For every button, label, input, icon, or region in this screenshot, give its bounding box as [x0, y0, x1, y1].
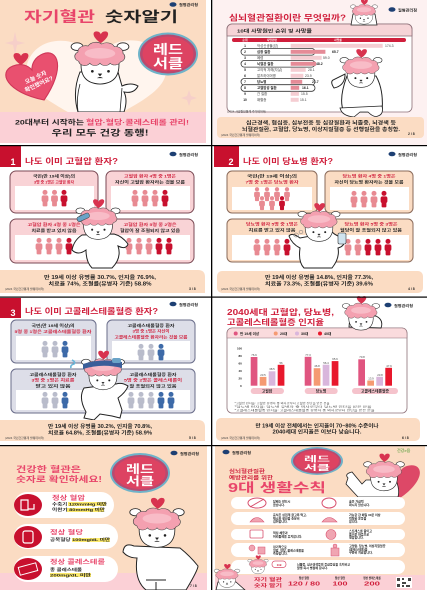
row values: 59.0 — [323, 56, 330, 60]
category pills: 고콜레스테롤혈증 — [361, 388, 389, 394]
card: normal cholesterol: 200mg/dL 미만 — [50, 572, 92, 578]
rule row 3: 생활합니다. — [349, 535, 364, 540]
rule row 5: 발생 즉시 병원에 갑니다. — [297, 565, 328, 570]
bottom band: numbers: 자기 혈관 — [254, 576, 283, 583]
card 2 — [107, 320, 195, 363]
big white heart background — [26, 40, 166, 128]
page number: 7 / 8 — [190, 584, 197, 588]
card 3: 고콜레스테롤혈증 환자 — [30, 372, 77, 377]
title: 예방관리를 위한 — [229, 474, 274, 482]
seal: red circle — [138, 32, 198, 76]
row numbers: 3 — [244, 56, 246, 60]
row names: 악성신생물(암) — [257, 43, 278, 48]
bottom band: (2024 국민건강통계 발췌데이터) — [221, 286, 260, 291]
panel: what is cardio-cerebrovascular disease — [213, 0, 427, 145]
chart panel — [227, 328, 407, 413]
bottom band — [217, 117, 424, 138]
card 3 — [10, 219, 98, 263]
card 4: 5명 중 2명은 콜레스테롤이 — [124, 378, 183, 382]
card 4: 혈압이 잘 조절되지 않고 있음 — [120, 228, 181, 233]
logo — [170, 302, 198, 307]
row numbers: 9 — [244, 92, 246, 96]
title: 심뇌혈관질환 — [229, 468, 266, 475]
row numbers: 7 — [244, 80, 246, 84]
bottom band: numbers: 정상 혈압 — [299, 576, 310, 580]
card: normal blood pressure: 이완기 80mmHg 미만 — [52, 507, 106, 512]
row values: 15.5 — [301, 92, 308, 96]
row values: 28.1 — [308, 68, 315, 72]
card 4: 혈당이 잘 조절되지 않고 있음 — [340, 228, 403, 232]
title — [228, 468, 326, 495]
card: normal cholesterol: 총 콜레스테롤 — [50, 567, 83, 572]
bottom band: 만 19세 이상 유병률 30.2%, 인지율 70.8%, — [48, 423, 153, 430]
alpaca peeking — [342, 296, 382, 330]
bar values: 23.8 — [377, 373, 383, 377]
bottom band: numbers: 정상 혈당 — [335, 576, 346, 580]
notes: *당뇨병 인지율: 당뇨병 유병자 중 의사로부터 당뇨병 진단을 받은 분율 — [234, 404, 373, 408]
number tab — [214, 146, 239, 167]
legend: 만 19세 이상 — [240, 331, 260, 336]
rule row 3: 허리둘레를 유지합니다. — [273, 533, 302, 538]
seal: red circle: 서클 — [153, 56, 183, 71]
card: normal blood pressure — [14, 492, 114, 518]
icon: treatment — [331, 544, 339, 556]
bottom band: 만 19세 이상 유병률 30.7%, 인지율 76.9%, — [44, 274, 157, 281]
icon: regular check — [249, 545, 265, 554]
row names: 심장 질환 — [257, 49, 271, 54]
notes: *고콜레스테롤혈증 인지율: 고콜레스테롤혈증 유병자 중 의사로부터 진단을 받은 분율 — [234, 408, 376, 412]
card 1: 국민(만 19세 이상)의 — [247, 174, 298, 178]
row numbers: 10 — [243, 98, 247, 102]
table header: 사망원인 — [267, 38, 278, 42]
logo: 질병관리청 — [394, 303, 413, 308]
rule row 5: 뇌졸중, 심근경색증의 응급증상을 숙지하고 — [297, 562, 350, 566]
table panel: 10대 사망원인 순위 및 사망률 — [237, 28, 313, 34]
card 2: 고혈압 환자 4명 중 1명은 — [124, 174, 177, 178]
alpaca character — [72, 199, 128, 268]
panel: nine lifestyle rules — [214, 446, 425, 590]
bottom band: 6 / 8 — [402, 436, 409, 440]
notes: *고혈압 인지율: 고혈압 유병자 중 의사로부터 고혈압 진단을 받은 분율 — [234, 401, 331, 405]
logo: 질병관리청 — [398, 8, 417, 12]
icon: no smoking — [248, 498, 266, 508]
alpaca character — [123, 498, 198, 590]
title: 자기혈관 — [24, 9, 95, 26]
icon: exercise — [322, 518, 337, 522]
bottom band: (2024 국민건강통계 발췌데이터) — [221, 435, 260, 440]
bottom band: (2024 국민건강통계 발췌데이터) — [5, 286, 44, 291]
logo: 질병관리청 — [398, 152, 417, 157]
seal: red circle: 서클 — [126, 475, 155, 488]
row values: 16.1 — [302, 86, 309, 90]
seal: red circle: 서클 — [304, 462, 330, 472]
card: normal blood pressure: 정상 혈압 — [52, 494, 86, 502]
card 2: 3명 중 1명은 자신이 — [132, 328, 170, 334]
row numbers: 2 — [244, 50, 246, 54]
card 4: 고혈압 환자 5명 중 2명은 — [124, 222, 177, 227]
icon: blood pressure cuff — [21, 500, 34, 510]
rule row 4: 혈압, 혈당, 콜레스테롤을 — [273, 547, 304, 552]
rule row 2: 합니다. — [349, 519, 358, 524]
bar values: 70.8 — [359, 355, 365, 359]
title: 숫자알기 — [105, 9, 178, 26]
card 3: 받고 있지 않음 — [36, 384, 71, 388]
seal: red circle: 레드 — [126, 462, 155, 476]
row numbers: 1 — [244, 44, 246, 48]
rule row 4: (콜레스테롤)을 — [349, 546, 368, 551]
card 3 — [11, 369, 96, 413]
bar values — [251, 353, 392, 380]
title — [24, 9, 178, 26]
highlights — [67, 502, 106, 512]
y axis labels: 20 — [238, 376, 242, 380]
card 1: 7명 중 1명은 당뇨병 환자 — [246, 180, 299, 184]
category pills: 고혈압 — [262, 388, 273, 394]
title — [16, 464, 102, 484]
legend — [234, 331, 331, 336]
rule row 1: 끊습니다. — [273, 502, 285, 507]
alpaca character — [289, 203, 346, 268]
bottom band: (2024 국민건강통계 발췌데이터) — [221, 132, 260, 137]
row names: 당뇨병 — [257, 79, 266, 84]
card: normal blood sugar: 정상 혈당 — [50, 528, 84, 536]
rule row 3: 적정 체중과 — [273, 530, 288, 535]
icon: glucose meter — [23, 531, 33, 543]
title: 심뇌혈관질환이란 무엇일까? — [229, 12, 346, 22]
row names: 알츠하이머병 — [257, 73, 276, 78]
heart speech bubble — [3, 50, 69, 110]
row names: 뇌혈관 질환 — [257, 61, 274, 66]
panel: hypertension — [0, 146, 211, 296]
seal: red circle — [110, 453, 170, 493]
card 4 — [107, 369, 195, 413]
seal: red circle — [291, 447, 343, 475]
table header: 순위 — [242, 38, 248, 42]
bottom band: 2040세대 인지율은 이보다 낮습니다. — [272, 428, 362, 436]
card 1 — [10, 171, 98, 213]
rule row 3: 스트레스를 줄이고 — [349, 528, 372, 533]
title: 고콜레스테롤혈증 인지율 — [227, 317, 325, 327]
rule row 3: 즐거운 마음으로 — [349, 531, 369, 536]
bars — [251, 357, 392, 386]
rule row 2: 음식은 싱겁게 골고루 먹고, — [273, 512, 307, 517]
logo — [170, 2, 198, 7]
y axis labels: 0 — [240, 384, 242, 388]
card 2: 고콜레스테롤혈증 환자라는 것을 모름 — [114, 334, 188, 340]
bar values: 56.4 — [323, 361, 329, 365]
panel: diabetes — [213, 146, 427, 296]
row values — [300, 44, 394, 102]
card 4: 고콜레스테롤혈증 환자 — [130, 372, 177, 377]
bar values: 46.8 — [314, 364, 320, 368]
icon: cholesterol tag — [18, 563, 38, 575]
card 4: 당뇨병 환자 5명 중 3명은 — [344, 222, 398, 226]
row names: 고의적 자해(자살) — [257, 67, 282, 72]
bottom band: 치료율 74%, 조절률(유병자 기준) 58.8% — [48, 280, 152, 288]
card: normal blood pressure: 수축기 120mmHg 미만 — [52, 502, 108, 506]
title: 나도 이미 고혈압 환자? — [25, 156, 118, 166]
seal: red circle: 레드 — [153, 42, 183, 57]
rule row 4: 꾸준히 치료합니다. — [349, 550, 373, 555]
y axis labels: 80 — [238, 354, 242, 358]
card 3: 치료를 받고 있지 않음 — [248, 228, 296, 232]
logo — [222, 450, 251, 455]
title — [227, 307, 334, 327]
number tab: 1 — [10, 157, 16, 167]
rule row 4: 정기적으로 — [273, 544, 287, 549]
row values: 21.7 — [312, 80, 319, 84]
row values: 15.1 — [300, 98, 307, 102]
bottom band: 치료율 73.3%, 조절률(유병자 기준) 39.6% — [265, 280, 374, 288]
highlight pills — [241, 48, 315, 91]
card 3: 당뇨병 환자 5명 중 1명은 — [246, 222, 299, 226]
heart speech bubble: 확인했어요? — [24, 74, 55, 94]
bar values: 47.9 — [386, 364, 392, 368]
card 1 — [227, 171, 317, 213]
bottom band: numbers: 숫자 알기 — [254, 582, 282, 589]
bar values: 38.5 — [269, 367, 275, 371]
rule row 1 — [231, 497, 405, 509]
y axis labels: 40 — [238, 369, 242, 373]
card 3 — [227, 219, 317, 262]
row values: 23.9 — [305, 74, 312, 78]
rule row 2: 채소와 생선을 충분히 — [273, 515, 300, 520]
card 3: 3명 중 1명은 치료를 — [32, 378, 75, 382]
logo: 질병관리청 — [179, 302, 198, 307]
panel: 2040 awareness chart — [213, 296, 427, 445]
card 1: 5명 중 1명은 고콜레스테롤혈증 환자 — [14, 329, 92, 334]
row values: 65.7 — [332, 50, 339, 54]
bar values: 13.9 — [368, 376, 374, 380]
row names — [257, 43, 282, 102]
bar values: 77.3 — [305, 353, 311, 357]
logo: 질병관리청 — [180, 451, 199, 456]
highlight — [72, 538, 110, 542]
bar values: 76.9 — [251, 353, 257, 357]
source note: (2024 사망원인통계 주가데이터) — [227, 108, 266, 114]
bottom band: 혈압·혈당·콜레스테롤 관리! — [86, 118, 189, 126]
logo: 질병관리청 — [179, 2, 198, 7]
bottom band: 만 19세 이상 유병률 14.8%, 인지율 77.3%, — [265, 274, 374, 281]
sparkle decorations — [5, 32, 197, 106]
icon: alpaca with emergency bubble: 119 — [277, 563, 282, 567]
bottom band: 5 / 8 — [189, 436, 196, 440]
title: 9대 생활수칙 — [228, 480, 326, 495]
table panel — [227, 24, 412, 112]
number tab — [0, 146, 21, 167]
bottom band: 심근경색, 협심증, 심부전증 등 심장질환과 뇌졸중, 뇌경색 등 — [246, 120, 396, 126]
row names: 패혈증 — [257, 97, 266, 102]
number tab: 2 — [228, 157, 234, 167]
card 1: 국민(만 19세 이상)의 — [33, 174, 76, 178]
rule row 5 — [231, 555, 405, 574]
logo: 질병관리청 — [232, 450, 251, 455]
bottom band: 2 / 8 — [408, 132, 415, 136]
alpaca character — [332, 49, 382, 117]
category pills — [251, 388, 398, 394]
icon: body weight — [250, 530, 263, 538]
bottom band: (2024 국민건강통계 발췌데이터) — [5, 435, 44, 440]
card 3: 고혈압 환자 4명 중 1명은 — [28, 222, 81, 227]
title: 나도 이미 당뇨병 환자? — [243, 156, 333, 166]
title: 2040세대 고혈압, 당뇨병, — [227, 307, 334, 317]
title: 숫자로 확인하세요! — [16, 474, 102, 484]
logo — [170, 152, 198, 157]
card: normal blood sugar — [14, 524, 118, 549]
bar values: 65.9 — [332, 357, 338, 361]
card 4 — [325, 219, 413, 262]
bottom band: numbers: 100 — [332, 582, 348, 588]
row names: 간 질환 — [257, 91, 267, 96]
bottom band: numbers: 200 — [364, 582, 380, 588]
logo — [384, 303, 413, 308]
panel: cover — [0, 0, 206, 143]
table header: 사망률 — [334, 38, 342, 42]
bottom band — [0, 112, 206, 143]
rule row 2: 섭취합니다. — [273, 519, 288, 524]
green partner logo: 건강e음 — [397, 447, 411, 453]
card 2: 고콜레스테롤혈증 환자 — [128, 323, 175, 328]
panel: hypercholesterolemia — [0, 298, 211, 445]
alpaca bottom-left — [214, 564, 245, 590]
card 1: 3명 중 1명은 고혈압 환자 — [34, 180, 74, 184]
bars — [291, 44, 383, 102]
rule row 1: 술은 가급적 — [349, 498, 364, 504]
card 2: 자신이 당뇨병 환자라는 것을 모름 — [334, 180, 404, 184]
rule row 4: 측정합니다. — [273, 551, 288, 556]
bar values: 56 — [279, 361, 283, 365]
alpaca character — [71, 31, 138, 112]
bottom band: 우리 모두 건강 동행! — [52, 128, 148, 138]
number tab — [0, 298, 21, 318]
rule row 1: 마시지 않습니다. — [349, 502, 370, 507]
logo — [388, 152, 417, 157]
panel: check your numbers — [0, 446, 207, 590]
rule row 3 — [231, 528, 405, 540]
alpaca character with headband — [71, 351, 128, 420]
rule row 2: 가능한 한 매일 30분 이상 — [349, 512, 381, 517]
icon: alpaca with emergency bubble — [248, 555, 286, 574]
rule row 2: 적절한 운동을 — [349, 515, 367, 520]
card 1: 국민(만 19세 이상)의 — [32, 323, 75, 328]
bottom band: numbers: 정상 콜레스테롤 — [363, 576, 381, 580]
card: normal cholesterol — [14, 556, 118, 582]
QR code — [396, 577, 412, 588]
legend: 40대 — [324, 331, 331, 336]
card 3: 치료를 받고 있지 않음 — [32, 228, 77, 233]
legend: 20대 — [280, 331, 287, 336]
card: normal cholesterol: 정상 콜레스테롤 — [50, 558, 106, 566]
bar values: 23.5 — [260, 373, 266, 377]
card 2: 당뇨병 환자 4명 중 1명은 — [342, 174, 396, 178]
notes — [234, 401, 376, 412]
row numbers: 5 — [244, 68, 246, 72]
card: normal blood sugar: 공복혈당 100mg/dL 미만 — [50, 537, 111, 542]
bottom band: 뇌혈관질환, 고혈압, 당뇨병, 이상지질혈증 등 선행질환을 총칭함. — [242, 126, 401, 133]
highlight — [50, 573, 91, 577]
logo — [170, 451, 199, 456]
row numbers — [243, 44, 247, 102]
bottom band: 만 19세 이상 전체에서는 인지율이 70~80% 수준이나 — [256, 422, 379, 430]
row numbers: 8 — [244, 86, 246, 90]
title: 나도 이미 고콜레스테롤혈증 환자? — [25, 306, 158, 316]
logo — [388, 7, 417, 12]
legend: 30대 — [301, 331, 308, 336]
card 1 — [11, 320, 96, 363]
rule row 1: 담배는 반드시 — [273, 498, 291, 504]
card 2: 자신이 고혈압 환자라는 것을 모름 — [115, 180, 186, 184]
row names: 폐렴 — [257, 55, 263, 60]
card 2 — [106, 171, 194, 213]
heart speech bubble: 오늘 숫자 — [24, 69, 48, 86]
y axis labels — [237, 346, 242, 388]
bottom band: numbers — [254, 576, 412, 589]
bottom band — [0, 270, 205, 293]
logo: 질병관리청 — [179, 152, 198, 157]
bottom band — [216, 418, 420, 441]
rule row 4: 고혈압, 당뇨병, 이상지질혈증 — [349, 543, 386, 548]
seal: red circle: 레드 — [304, 454, 330, 464]
rule row 4 — [231, 543, 405, 557]
row values: 48.2 — [316, 62, 323, 66]
table header — [232, 38, 406, 42]
big red heart with alpaca — [346, 454, 420, 499]
card 2 — [325, 171, 413, 213]
bottom band — [217, 271, 423, 293]
icon: stress — [326, 530, 336, 540]
card 4: 잘 조절되지 않고 있음 — [130, 384, 177, 388]
bottom band: 치료율 64.8%, 조절률(유병자 기준) 58.9% — [48, 430, 153, 436]
icon: healthy food — [250, 518, 264, 522]
bottom band: 4 / 8 — [408, 287, 415, 291]
category pills: 당뇨병 — [316, 388, 327, 394]
row numbers: 4 — [244, 62, 246, 66]
number tab: 3 — [10, 308, 16, 318]
bottom band: numbers: 120 / 80 — [288, 582, 320, 588]
card 4 — [106, 219, 194, 263]
row numbers: 6 — [244, 74, 246, 78]
rule row 2 — [231, 512, 405, 525]
row values: 174.3 — [385, 44, 394, 48]
row names: 고혈압성 질환 — [257, 85, 278, 90]
bottom band: 3 / 8 — [189, 287, 196, 291]
bottom band: 20대부터 시작하는 — [15, 118, 84, 126]
bottom band — [0, 420, 205, 441]
alpaca peeking top — [350, 0, 378, 25]
icon: no alcohol — [322, 498, 336, 508]
title: 건강한 혈관은 — [16, 464, 82, 474]
y axis labels: 60 — [238, 362, 242, 366]
y axis labels: 100 — [237, 346, 242, 350]
